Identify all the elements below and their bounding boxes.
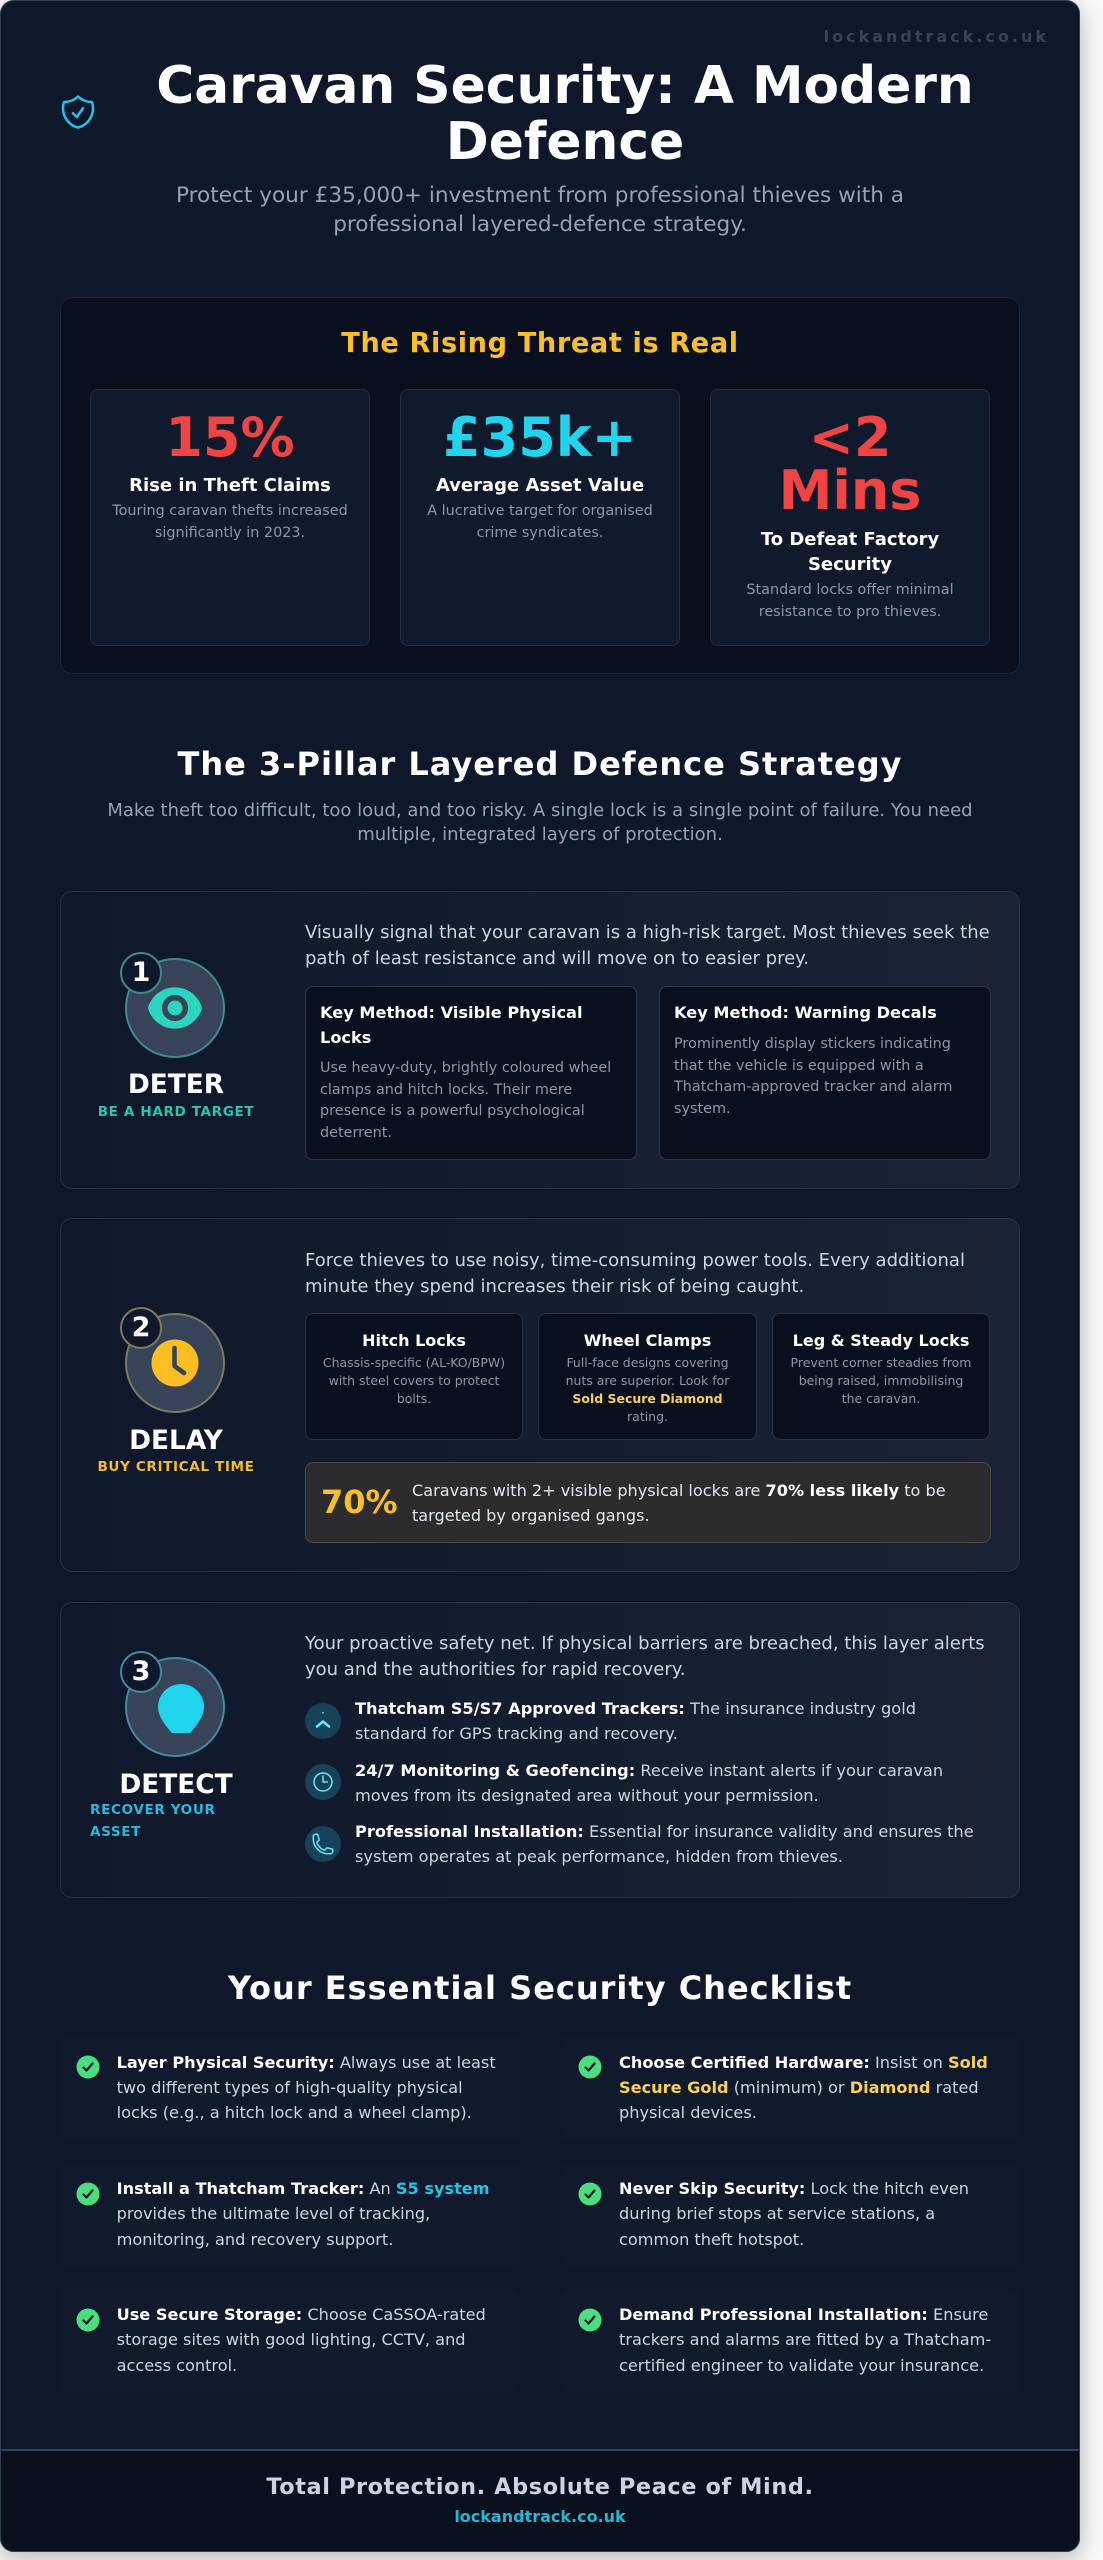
strategy description: multiple, integrated layers of protection. — [357, 824, 723, 845]
clock glyph — [313, 1772, 333, 1792]
pillar subtitle: ASSET — [90, 1824, 141, 1840]
card text: Chassis-specific (AL-KO/BPW) — [323, 1355, 505, 1370]
panel: pillar 2 delay — [60, 1218, 1020, 1572]
item text — [117, 2179, 490, 2249]
checklist item 1 — [60, 2036, 520, 2140]
number badge 2: 2 — [132, 1312, 150, 1343]
number badge 1 — [120, 952, 162, 994]
number badge 1: 1 — [132, 957, 150, 988]
clock glyph — [152, 1340, 198, 1386]
item text: two different types of high-quality physical — [117, 2078, 463, 2097]
item text: Never Skip Security: Lock the hitch even — [619, 2179, 969, 2198]
item text: access control. — [117, 2356, 237, 2375]
stat label: Rise in Theft Claims — [129, 475, 331, 496]
icon: tracker — [305, 1703, 341, 1739]
icon: clock — [305, 1764, 341, 1800]
eye glyph — [148, 987, 202, 1029]
lock card: leg and steady — [772, 1313, 990, 1440]
card text: Prominently display stickers indicating — [674, 1036, 951, 1052]
pillar text: path of least resistance and will move on to easier prey. — [305, 948, 809, 969]
card text — [320, 1060, 611, 1141]
stat description — [746, 582, 954, 620]
list item: trackers: standard for GPS tracking and recovery. — [355, 1724, 678, 1743]
item text — [619, 2179, 969, 2249]
tracker glyph — [316, 1712, 330, 1728]
item text: during brief stops at service stations, a — [619, 2204, 935, 2223]
stat label — [760, 529, 939, 575]
icon: check — [578, 2308, 602, 2332]
item text: Choose Certified Hardware: Insist on Sold — [619, 2052, 988, 2072]
card text — [674, 1036, 952, 1117]
card title — [320, 1003, 583, 1047]
item text — [619, 2052, 988, 2122]
title: Caravan Security: A Modern — [156, 56, 974, 116]
card text: Full-face designs covering — [566, 1355, 729, 1370]
number badge 3: 3 — [132, 1656, 150, 1687]
stat card: defeat time — [710, 389, 990, 646]
icon: check — [578, 2056, 602, 2078]
callout text — [412, 1481, 946, 1525]
checklist item 2 — [561, 2036, 1020, 2140]
title: Defence — [446, 112, 684, 172]
item text — [619, 2302, 991, 2378]
icon: pin in circle — [125, 1657, 225, 1757]
pillar text — [305, 922, 990, 969]
list item: installation: Professional Installation: Essential for insurance validity and ensures the — [355, 1822, 974, 1840]
pillar text: you and the authorities for rapid recovery. — [305, 1659, 686, 1680]
item text: trackers and alarms are fitted by a Thatcham- — [619, 2330, 991, 2349]
item text: storage sites with good lighting, CCTV, and — [117, 2330, 466, 2349]
checklist heading: Your Essential Security Checklist — [228, 1969, 852, 2007]
card text: nuts are superior. Look for — [566, 1373, 729, 1388]
checklist item 6 — [561, 2288, 1020, 2392]
panel: pillar 1 deter — [60, 891, 1020, 1189]
pillar title: DETER — [128, 1069, 224, 1100]
panel: rising threat — [60, 297, 1020, 674]
stat description: significantly in 2023. — [155, 525, 305, 541]
key method card: physical locks — [305, 986, 637, 1160]
strategy description: Make theft too difficult, too loud, and too risky. A single lock is a single point of failure. You need — [107, 800, 973, 820]
stat number: £35k+ — [443, 406, 637, 469]
list item: monitoring — [355, 1760, 943, 1805]
lock card: hitch — [305, 1313, 523, 1440]
number badge 3 — [120, 1651, 162, 1693]
pillar subtitle: BUY CRITICAL TIME — [97, 1459, 255, 1475]
stat number: Mins — [779, 459, 921, 522]
card title: Hitch Locks — [362, 1331, 466, 1350]
pillar subtitle — [90, 1802, 216, 1840]
footer tagline: Total Protection. Absolute Peace of Mind. — [266, 2474, 814, 2500]
card text: Sold Secure Diamond — [572, 1391, 723, 1406]
pillar text: minute they spend increases their risk of being caught. — [305, 1276, 804, 1297]
stat description: Standard locks offer minimal — [746, 582, 954, 598]
checklist item 3 — [60, 2162, 520, 2266]
subtitle: professional layered-defence strategy. — [333, 212, 747, 237]
footer — [0, 2449, 1080, 2552]
stat description: crime syndicates. — [477, 525, 603, 541]
callout: 70 percent — [305, 1462, 991, 1543]
card title: Key Method: Visible Physical — [320, 1003, 583, 1022]
list item: trackers — [355, 1699, 916, 1743]
stat number: 15% — [165, 406, 295, 469]
checklist item 5 — [60, 2288, 520, 2392]
pillar subtitle: BE A HARD TARGET — [98, 1104, 254, 1120]
stat number: <2 — [809, 406, 891, 469]
card title: Locks — [320, 1028, 371, 1047]
icon: check — [76, 2182, 100, 2206]
subtitle — [176, 183, 904, 237]
key method card: decals — [659, 986, 991, 1160]
pillar text — [305, 1633, 985, 1680]
icon: check — [578, 2182, 602, 2206]
list item: monitoring: 24/7 Monitoring & Geofencing: Receive instant alerts if your caravan — [355, 1760, 943, 1780]
number badge 2 — [120, 1307, 162, 1349]
pillar text: Force thieves to use noisy, time-consuming power tools. Every additional — [305, 1250, 965, 1271]
item text: physical devices. — [619, 2103, 757, 2122]
pillar text: Visually signal that your caravan is a high-risk target. Most thieves seek the — [305, 922, 990, 943]
item text: common theft hotspot. — [619, 2230, 804, 2249]
item text — [117, 2052, 496, 2122]
pillar subtitle: RECOVER YOUR — [90, 1802, 216, 1818]
item text: Secure Gold (minimum) or Diamond rated — [619, 2078, 979, 2097]
strategy description — [107, 800, 973, 845]
pin glyph — [158, 1684, 204, 1733]
card text: that the vehicle is equipped with a — [674, 1058, 924, 1074]
list item: trackers: Thatcham S5/S7 Approved Trackers: The insurance industry gold — [355, 1699, 916, 1718]
pillar title: DETECT — [119, 1769, 233, 1800]
threat heading: The Rising Threat is Real — [341, 328, 739, 358]
subtitle: Protect your £35,000+ investment from professional thieves with a — [176, 183, 904, 208]
item text: locks (e.g., a hitch lock and a wheel clamp). — [117, 2103, 472, 2122]
card text: clamps and hitch locks. Their mere — [320, 1082, 572, 1098]
stat description — [427, 503, 653, 541]
card text — [566, 1355, 730, 1424]
card title: Wheel Clamps — [584, 1331, 711, 1350]
item text: monitoring, and recovery support. — [117, 2230, 393, 2249]
checklist item 4 — [561, 2162, 1020, 2266]
phone glyph — [312, 1834, 334, 1854]
callout number: 70% — [321, 1483, 398, 1521]
icon: eye in circle — [125, 958, 225, 1058]
stat description: A lucrative target for organised — [427, 503, 653, 519]
list item: monitoring: moves from its designated area without your permission. — [355, 1786, 819, 1805]
item text — [117, 2305, 486, 2375]
card text: system. — [674, 1101, 731, 1117]
card text: Prevent corner steadies from — [791, 1355, 971, 1370]
stat card: theft claims — [90, 389, 370, 646]
card text: presence is a powerful psychological — [320, 1103, 585, 1119]
card text: bolts. — [397, 1391, 431, 1406]
callout text: Caravans with 2+ visible physical locks are 70% less likely to be — [412, 1481, 946, 1500]
icon: phone — [305, 1826, 341, 1862]
list item: installation — [355, 1822, 974, 1866]
item text: Use Secure Storage: Choose CaSSOA-rated — [117, 2305, 486, 2324]
card text: rating. — [627, 1409, 668, 1424]
icon: check — [76, 2056, 100, 2078]
card text: Thatcham-approved tracker and alarm — [674, 1079, 952, 1095]
stat label: Security — [808, 554, 892, 575]
card text: with steel covers to protect — [329, 1373, 499, 1388]
stat description: resistance to pro thieves. — [759, 604, 941, 620]
stat label: Average Asset Value — [436, 475, 644, 496]
footer link: lockandtrack.co.uk — [454, 2507, 626, 2526]
stat description — [112, 503, 348, 541]
card text: the caravan. — [842, 1391, 920, 1406]
list item: installation: system operates at peak performance, hidden from thieves. — [355, 1847, 843, 1866]
item text: Layer Physical Security: Always use at least — [117, 2052, 496, 2072]
icon: shield check — [62, 95, 94, 129]
panel: pillar 3 detect — [60, 1602, 1020, 1898]
card text: Use heavy-duty, brightly coloured wheel — [320, 1060, 611, 1076]
callout text: targeted by organised gangs. — [412, 1506, 650, 1525]
card title: Key Method: Warning Decals — [674, 1003, 937, 1022]
item text: Install a Thatcham Tracker: An S5 system — [117, 2179, 490, 2198]
pillar text — [305, 1250, 965, 1297]
card title: Leg & Steady Locks — [793, 1331, 969, 1350]
icon: clock in circle — [125, 1313, 225, 1413]
card text: deterrent. — [320, 1125, 392, 1141]
card text — [323, 1355, 505, 1406]
pillar text: Your proactive safety net. If physical barriers are breached, this layer alerts — [305, 1633, 985, 1654]
stat number — [779, 406, 921, 522]
card text — [791, 1355, 971, 1406]
icon: check — [76, 2308, 100, 2332]
item text: Demand Professional Installation: Ensure — [619, 2305, 988, 2324]
watermark: lockandtrack.co.uk — [824, 27, 1049, 46]
stat label: To Defeat Factory — [761, 529, 939, 550]
pillar title: DELAY — [129, 1425, 223, 1456]
item text: provides the ultimate level of tracking, — [117, 2204, 430, 2223]
card text: being raised, immobilising — [799, 1373, 963, 1388]
title — [156, 56, 974, 172]
stat description: Touring caravan thefts increased — [112, 503, 348, 519]
stat card: asset value — [400, 389, 680, 646]
strategy heading: The 3-Pillar Layered Defence Strategy — [178, 745, 902, 783]
item text: certified engineer to validate your insurance. — [619, 2356, 984, 2375]
lock card: wheel clamps — [538, 1313, 757, 1440]
